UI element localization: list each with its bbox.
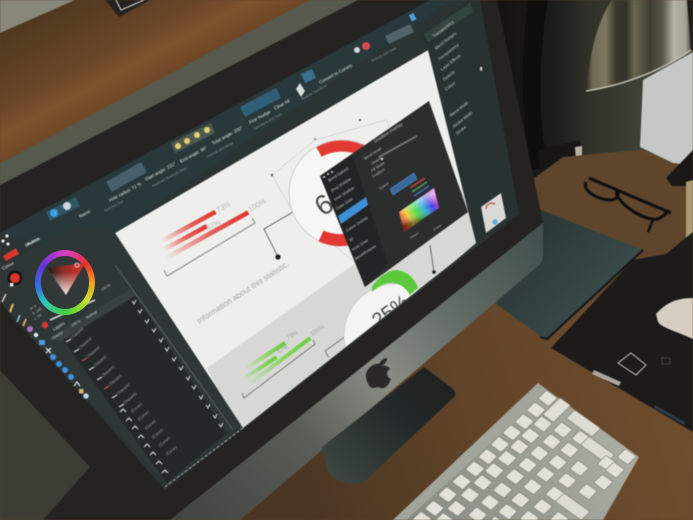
monitor stand foot [322,367,455,484]
layers tab [50,289,136,343]
toolbar labels: Name [78,208,92,219]
layer markers [66,339,168,473]
panel list: Blend Ranges [434,31,457,51]
left tools panel: (Square) [77,336,93,350]
toolbar secondary labels: Selection Tool [104,199,124,213]
toolbar secondary labels: Boolean Transform [301,84,328,101]
red bars bracket [164,218,255,276]
toolbar icon groups [46,13,417,221]
dialog controls: Fill Mode [370,161,385,173]
toolbar labels: Start angle: 231° [144,161,177,182]
wooden shelf at top left [0,0,320,170]
panel list: Opacity [442,69,457,82]
dark surface at lower left [0,370,90,520]
layers tab: Layers [52,320,66,332]
wall corner at top left [0,0,75,33]
keyboard keys [412,390,636,520]
red connector and dot [264,212,293,260]
toolbar labels: Rulers [26,236,41,247]
layers tab: Opacity: [50,330,64,341]
black circuit board [551,232,693,432]
green donut chart [343,269,418,347]
layers tab: Normal [85,310,98,320]
opacity slider [50,300,95,320]
black object at far right [666,150,693,186]
red bar labels: 73% [214,199,232,215]
green bars bracket [242,340,315,398]
monitor top silver edge [0,0,358,185]
desk lamp [523,0,693,172]
side tool icons [2,294,89,399]
left tools panel: Colour [1,260,15,271]
toolbar labels: Total angle: 200° [211,125,244,146]
top toolbar [0,0,452,255]
dialog menu: Colour Overlay [345,216,369,233]
red bar labels [206,198,266,231]
left tools panel: (Square) [69,326,85,340]
red stat bars [160,210,249,260]
panel list: Colour [444,80,457,92]
colour wheel [35,250,95,315]
left tools panel: (Square) [107,373,123,387]
desk wood at back right [529,150,693,300]
toolbar labels: Clear All [273,98,291,111]
panel list: Transparency [437,42,460,62]
left tools panel [0,226,243,487]
left tools panel: Brushes [24,236,41,248]
gradient selector [390,173,417,195]
floating dialog: Reset [409,231,419,240]
green stat bars [242,336,311,387]
toolbar labels: Hole radius: 71 % [108,181,142,203]
panel list: Transparency [432,19,455,39]
keyboard [393,383,639,520]
left tools panel: (Curve) [157,435,171,448]
picture frame at top [105,0,150,17]
left tools panel: (Square) [92,354,108,368]
dark wall behind monitor [490,0,693,182]
drinking glass [686,180,693,246]
green donut chart: 25% [368,291,414,332]
navigator thumbnail [481,193,506,233]
dialog menu: 3D [348,237,355,243]
toolbar secondary labels: Keyboard Shortcuts Snap [152,166,188,188]
toolbar secondary labels: Ungroup and Merge [206,141,234,159]
dialog controls [363,146,391,191]
colour picker selected swatch [8,270,22,286]
dialog menu: Inner Shadow [333,186,355,202]
colour values: 100 % [100,283,112,292]
dialog menu: Drop Shadow [330,177,352,193]
computer mouse [656,298,693,339]
dialog menu: Bevel/Emboss [354,244,377,261]
panel list [432,19,474,136]
left tools panel: (Curve) [129,401,143,414]
monitor silver chin [170,223,543,520]
dialog menu: Outer Glow [335,197,354,211]
left tools panel: (Curve) [164,444,178,457]
layers tab: 100 % [70,318,82,328]
panel list: Blend Mode [449,100,470,118]
panel list: Layer Effects [440,53,462,72]
toolbar secondary labels [104,45,398,213]
dialog menu [327,166,377,261]
colour values: L: 50 [33,313,42,321]
lower canvas band [207,189,476,428]
colour values: S: 100 [31,307,42,316]
toolbar labels: Fine Nudge [248,109,272,125]
layers list [63,296,227,483]
dialog title: Gradient Overlay [373,121,404,144]
share icon [1,234,10,246]
selection box [270,118,390,262]
red bar labels: 57% [204,217,222,233]
left tools panel: (Square) [85,345,101,359]
white wall on right [640,52,693,165]
panel list: Stroke [455,124,468,136]
colour swatch [3,248,19,261]
red donut chart: 65% [309,164,372,222]
colour spectrum [399,188,439,232]
layers footer [165,428,243,487]
left tools panel: (Curve) [150,427,164,440]
toolbar labels [26,62,354,247]
red donut chart [288,139,365,247]
dialog menu: Blend Options [327,166,350,183]
apple logo [366,358,391,388]
toolbar secondary labels: Arrange and Order [371,45,398,63]
toolbar labels: Convert to Curves [318,62,354,85]
right side panel [422,0,519,243]
dialog menu: Inner Glow [351,238,369,252]
colour values: H: 0 [29,304,37,311]
application window [0,0,519,490]
green bar labels: 57% [277,344,291,356]
glasses [585,178,671,232]
green bar labels [277,325,324,354]
graphics tablet [496,208,643,340]
window buttons [323,171,333,178]
monitor bezel [0,0,543,520]
toolbar secondary labels: Operations and Tools [253,112,283,131]
left tools panel: (Square) [115,382,131,396]
visibility checks [132,300,223,427]
green bar labels: 73% [286,330,300,342]
left tools panel: (Curve) [136,409,150,422]
dialog controls: Opacity [370,155,383,166]
floating dialog [320,101,468,287]
left tools panel: (Square) [122,391,138,405]
design canvas [115,50,490,440]
left tools panel: (Curve) [143,418,157,431]
green bar labels: 100% [310,324,327,338]
dialog controls: Blend Mode [363,146,383,161]
information text: Information about this statistic. [195,259,291,326]
dialog controls: Colour [378,181,391,191]
toolbar labels: End angle: 96° [179,145,208,164]
panel list: Stroke Width [452,110,474,129]
colour sliders [410,178,429,196]
colour values [29,283,112,321]
colour wheel triangle [47,263,85,295]
red bar labels: 100% [246,196,268,214]
dialog controls: Gradient [371,167,387,179]
green connector and dot [325,245,436,358]
left tools panel: (Square) [100,364,116,378]
selected menu item [338,197,368,224]
floating dialog: Close [432,223,442,232]
